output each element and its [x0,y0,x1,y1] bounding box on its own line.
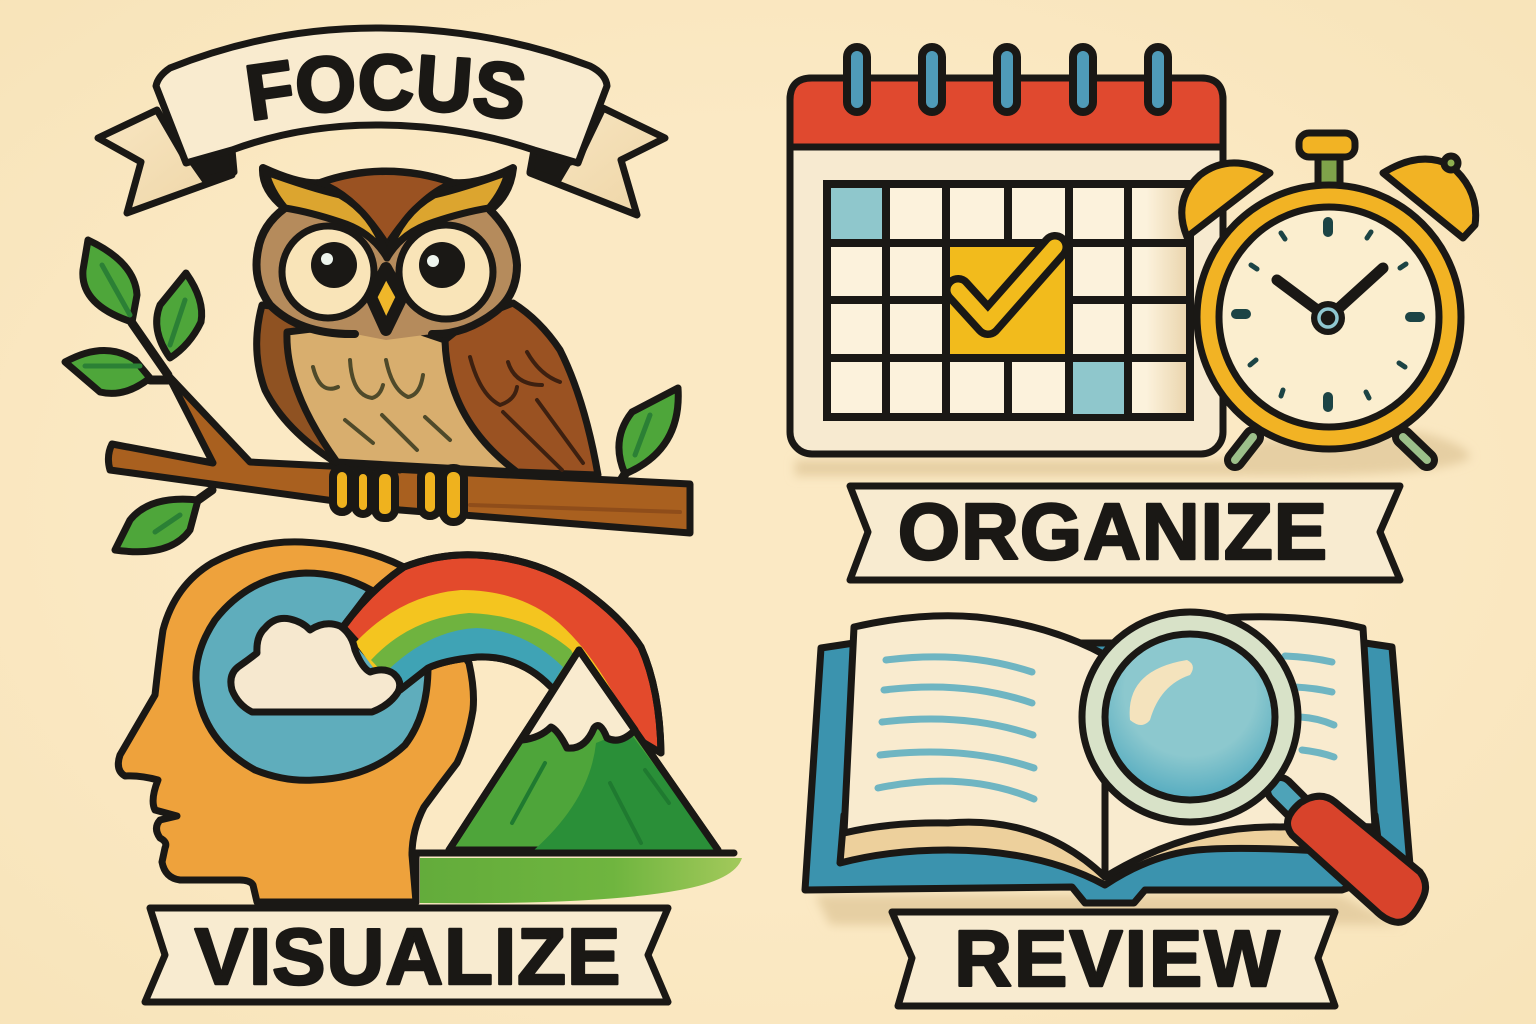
icon: open book [805,616,1410,903]
icon: branch with leaves [65,240,690,552]
icon: shadows under calendar and clock [795,432,1470,476]
icon: rainbow [343,555,661,753]
icon: cloud [231,618,400,712]
heading: review: REVIEW [954,914,1282,1003]
icon: calendar [790,47,1223,454]
icon: owl [256,168,598,522]
panel: organize [790,47,1476,580]
icon: alarm clock [1182,133,1476,460]
banner: focus [94,24,668,218]
panel: review [805,612,1426,1006]
icon: magnifying glass [1082,612,1426,922]
heading: organize: ORGANIZE [898,487,1328,576]
icon: mountain and grass [412,650,742,903]
banner: review [892,912,1335,1006]
icon: head silhouette [118,542,473,902]
panel: focus [62,24,694,556]
banner: organize [850,486,1400,580]
panel: visualize [118,542,742,1002]
icon: book shadow [815,895,1400,925]
heading: focus: FOCUS [246,53,525,121]
banner: visualize [145,908,668,1002]
heading: visualize: VISUALIZE [195,912,621,1001]
